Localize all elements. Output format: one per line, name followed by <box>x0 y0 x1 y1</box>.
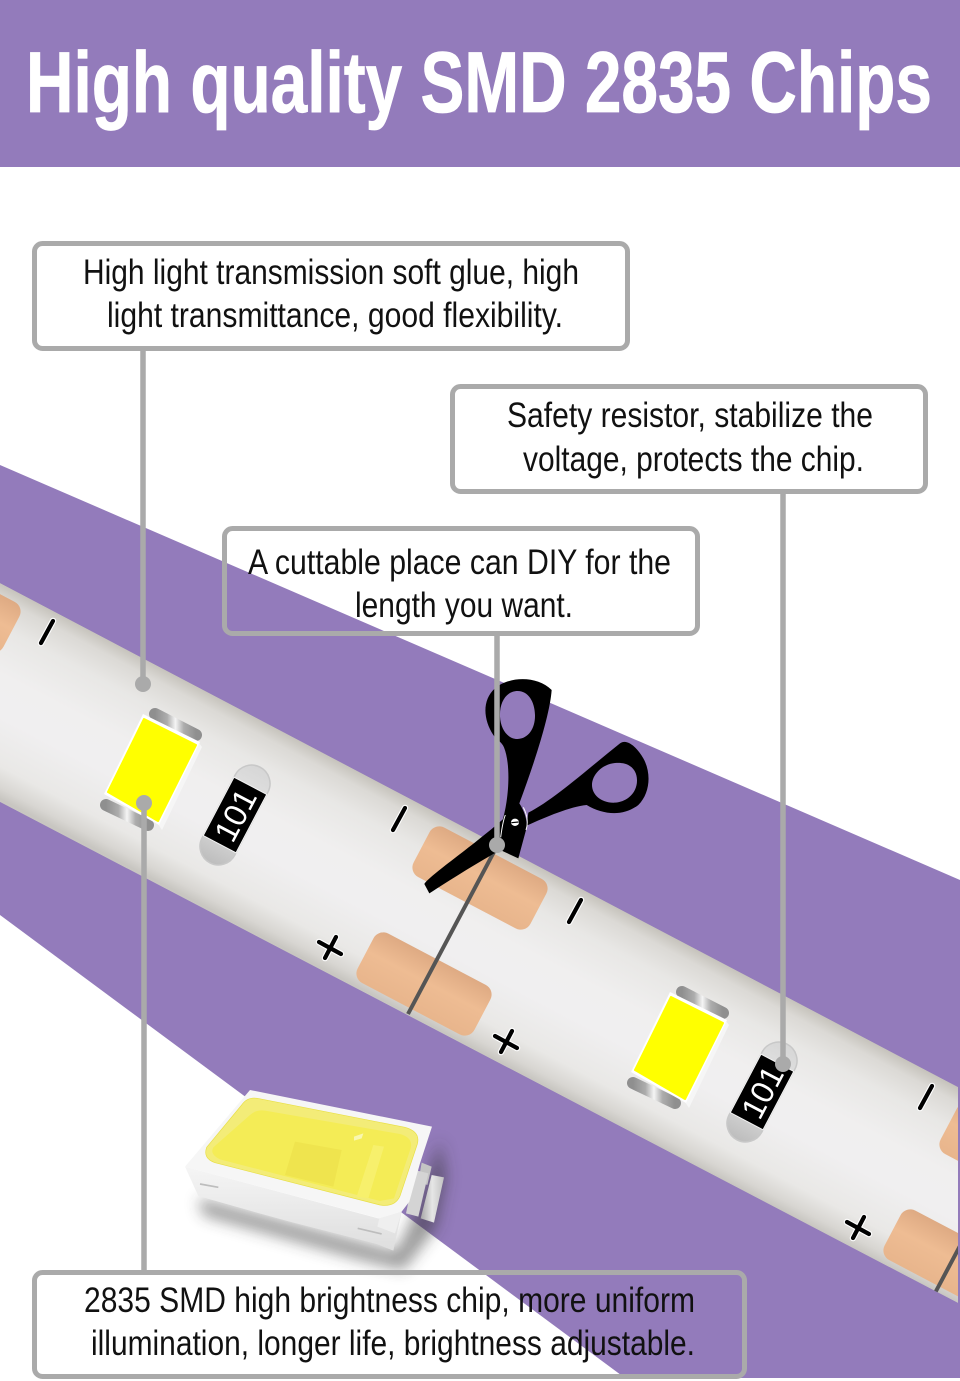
resistor left: 101 <box>207 783 264 848</box>
resistor left <box>199 764 271 866</box>
callout: soft glue: High light transmission soft glue, high <box>83 253 579 292</box>
callout: safety resistor <box>452 386 926 492</box>
resistor right: 101 <box>734 1060 791 1125</box>
purple diagonal band <box>0 465 960 1378</box>
cut lines <box>408 850 960 1293</box>
callout: cuttable place <box>224 528 698 634</box>
package side <box>185 1167 402 1251</box>
LED package close-up <box>185 1090 447 1270</box>
LED strip <box>0 545 960 1317</box>
package end chamfer <box>377 1212 402 1233</box>
LED chip right <box>631 992 729 1108</box>
callout: 2835 chip <box>34 1272 744 1376</box>
polarity marks <box>41 621 932 1238</box>
copper solder pads <box>0 545 960 1317</box>
callout: 2835 chip: illumination, longer life, brightness adjustable. <box>91 1324 695 1363</box>
title banner <box>0 0 960 167</box>
package shadow <box>198 1140 447 1270</box>
callout: cuttable place: length you want. <box>355 586 573 625</box>
callout: 2835 chip: 2835 SMD high brightness chip, more uniform <box>84 1281 695 1320</box>
resistor right <box>726 1041 798 1143</box>
die <box>285 1142 342 1187</box>
LED chip left <box>104 714 202 830</box>
callout: safety resistor: voltage, protects the chip. <box>523 440 864 479</box>
callout: soft glue <box>34 244 628 348</box>
yellow phosphor <box>206 1098 418 1205</box>
connector lines <box>135 350 791 1272</box>
icon: scissors <box>424 679 649 893</box>
side notches <box>200 1184 382 1234</box>
callout: safety resistor: Safety resistor, stabilize the <box>507 396 873 435</box>
metal pins <box>406 1163 444 1223</box>
callout: soft glue: light transmittance, good flexibility. <box>107 296 563 335</box>
callout: cuttable place: A cuttable place can DIY for the <box>248 543 671 582</box>
lens highlight <box>357 1145 384 1198</box>
package top <box>185 1090 432 1218</box>
